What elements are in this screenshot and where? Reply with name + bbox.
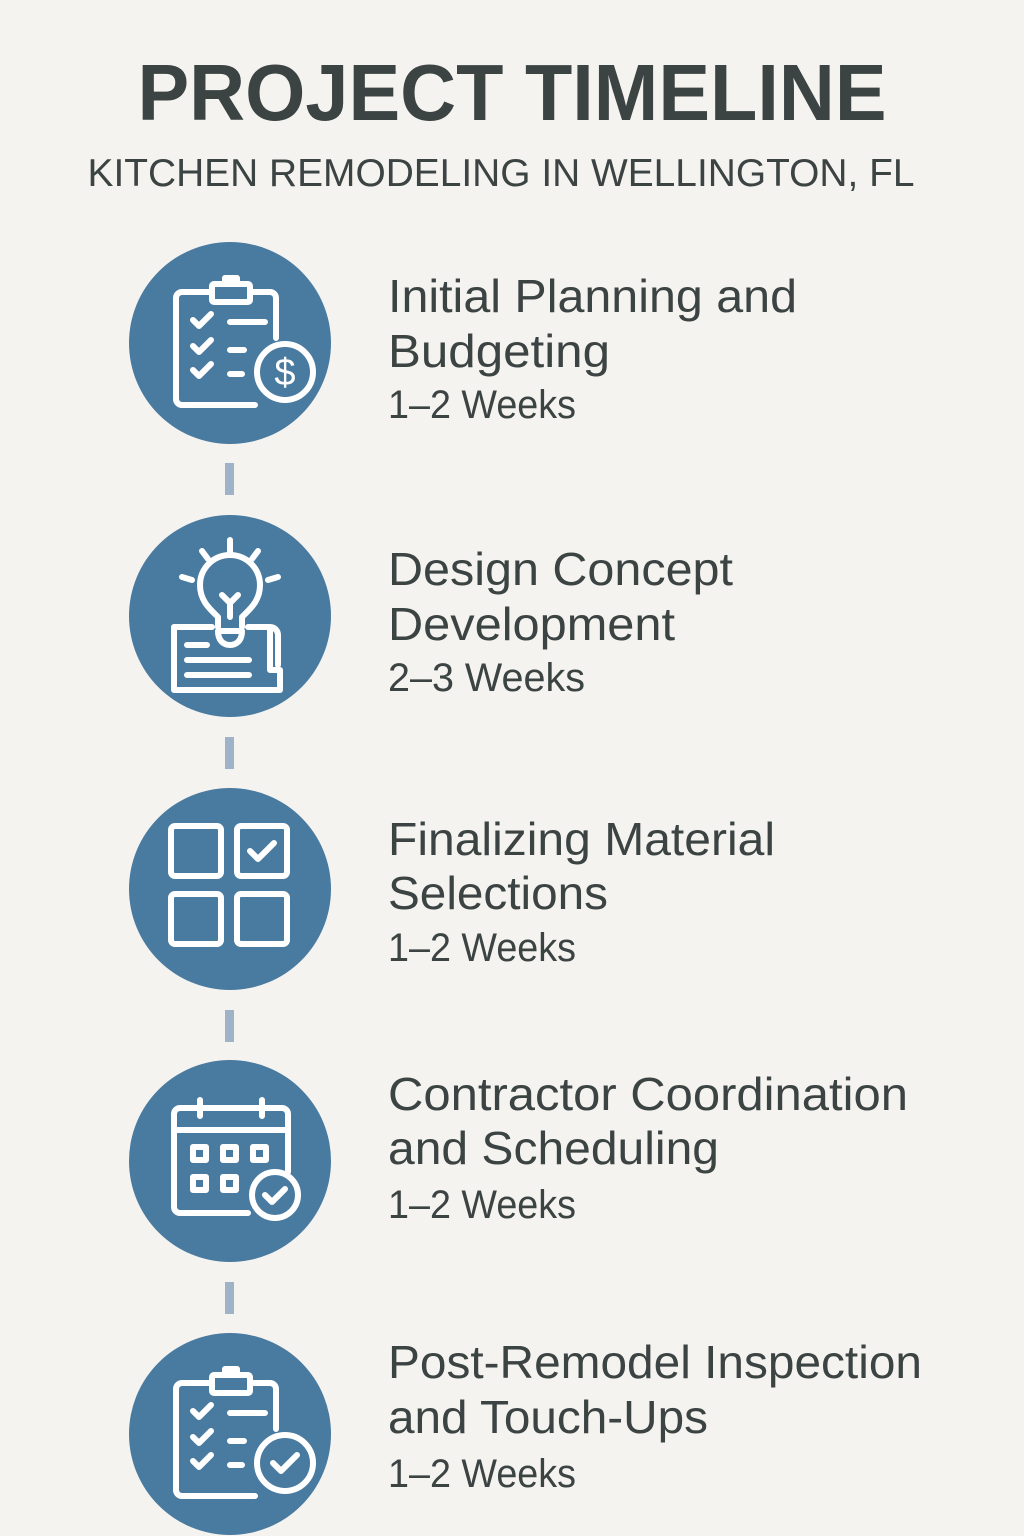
connector 4 [225, 1282, 234, 1314]
step 2: Development [388, 598, 675, 650]
icon: material grid [129, 788, 331, 990]
step 3 [129, 788, 775, 990]
connector 2 [225, 737, 234, 769]
step 3: 1–2 Weeks [388, 926, 576, 970]
step 5: 1–2 Weeks [388, 1452, 576, 1496]
step 4: 1–2 Weeks [388, 1183, 576, 1227]
step 2 [129, 515, 733, 717]
step 1: Budgeting [388, 325, 610, 377]
icon: calendar [129, 1060, 331, 1262]
title: PROJECT TIMELINE [138, 48, 886, 137]
step 2 text: Design Concept [388, 543, 733, 595]
icon: lightbulb over plan [129, 515, 331, 717]
step 1 [129, 242, 797, 444]
step 3: Selections [388, 867, 608, 919]
step 4 text: Contractor Coordination [388, 1068, 908, 1120]
step 4 [129, 1060, 908, 1262]
icon: planning clipboard [129, 242, 331, 444]
step 1 text: Initial Planning and [388, 270, 797, 322]
icon: inspection clipboard [129, 1333, 331, 1535]
step 3 text: Finalizing Material [388, 813, 775, 865]
step 5: and Touch-Ups [388, 1391, 708, 1443]
step 5 [129, 1333, 922, 1535]
connector 1 [225, 463, 234, 495]
step 5 text: Post-Remodel Inspection [388, 1336, 922, 1388]
icon: planning clipboard: $ [274, 352, 296, 394]
subtitle: KITCHEN REMODELING IN WELLINGTON, FL [88, 152, 914, 195]
connector 3 [225, 1010, 234, 1042]
step 1: 1–2 Weeks [388, 383, 576, 427]
step 4: and Scheduling [388, 1122, 719, 1174]
step 2: 2–3 Weeks [388, 656, 585, 700]
